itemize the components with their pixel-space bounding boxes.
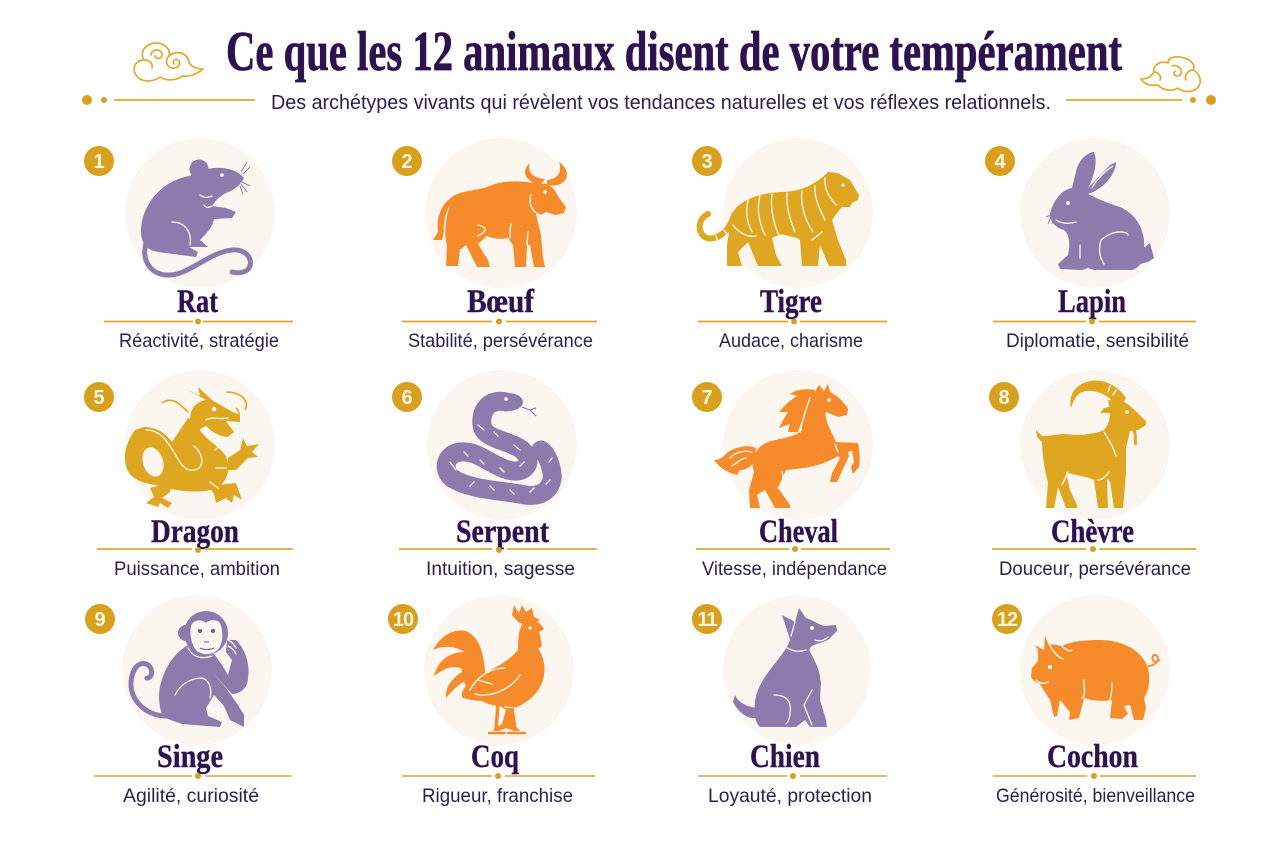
icon backdrop [1020,370,1170,520]
badge 12: 12 [997,609,1018,631]
divider [993,773,1196,779]
divider [992,546,1196,552]
icon: goat [1036,380,1146,508]
icon backdrop [427,370,577,520]
description: Audace, charisme [719,330,863,352]
description: Vitesse, indépendance [702,558,887,580]
icon: monkey [131,611,248,727]
panel: Tigre [692,138,887,352]
panel: Coq [388,595,595,807]
right ornament [1066,95,1216,105]
panel: Chien [692,595,887,807]
icon: rat [141,160,250,275]
badge 11: 11 [697,609,717,631]
divider [399,547,597,553]
divider [698,318,887,324]
left ornament [82,95,255,105]
icon backdrop [1020,595,1170,745]
divider [402,773,595,779]
name: Rat [177,284,218,320]
panel: Lapin [985,138,1196,352]
name: Chèvre [1051,514,1134,550]
badge 5: 5 [93,387,105,409]
icon backdrop [723,138,873,288]
badge 4 [985,146,1015,176]
badge 10 [388,604,418,634]
header [82,21,1216,114]
badge 9 [85,604,115,634]
description: Rigueur, franchise [422,785,573,807]
icon: tiger [700,172,859,266]
icon backdrop [125,370,275,520]
description: Intuition, sagesse [426,558,575,580]
divider [696,546,890,552]
panel: Dragon [84,370,293,580]
description: Stabilité, persévérance [408,330,593,352]
badge 6: 6 [401,387,413,409]
icon: snake [446,393,552,495]
icon: dragon [125,387,259,508]
name: Lapin [1058,284,1126,320]
icon backdrop [425,138,577,288]
description: Loyauté, protection [708,785,872,807]
badge 8 [989,382,1019,412]
name: Bœuf [467,284,535,320]
icon backdrop [723,595,871,745]
badge 4: 4 [994,151,1006,173]
panel: Bœuf [392,138,597,352]
icon backdrop [424,595,574,745]
badge 1: 1 [93,151,105,173]
badge 5 [84,382,114,412]
description: Diplomatie, sensibilité [1006,330,1189,352]
icon: right cloud [1141,57,1200,92]
badge 2 [392,146,422,176]
panel: Serpent [392,370,597,580]
panel: Cheval [692,370,890,580]
name: Dragon [151,514,239,550]
divider [97,547,293,553]
badge 11 [692,604,722,634]
panel: Singe [85,595,292,807]
panel: Chèvre [989,370,1196,580]
icon backdrop [1020,138,1170,288]
description: Réactivité, stratégie [119,330,279,352]
divider [104,318,293,324]
name: Tigre [760,284,822,320]
badge 7: 7 [701,387,713,409]
name: Chien [750,739,820,775]
name: Singe [157,739,223,775]
icon backdrop [122,595,272,745]
badge 1 [84,146,114,176]
badge 3: 3 [701,151,713,173]
badge 8: 8 [998,387,1010,409]
badge 12 [992,604,1022,634]
panel: Cochon [992,595,1196,807]
divider [94,773,292,779]
icon: rabbit [1046,152,1154,270]
icon: left cloud [134,43,203,81]
icon: horse [714,384,860,508]
divider [698,773,887,779]
name: Cochon [1047,739,1138,775]
description: Agilité, curiosité [123,785,259,807]
panel: Rat [84,138,293,352]
badge 7 [692,382,722,412]
badge 2: 2 [401,151,413,173]
icon backdrop [723,370,873,520]
description: Puissance, ambition [114,558,280,580]
badge 9: 9 [94,609,106,631]
description: Générosité, bienveillance [996,785,1195,807]
icon: rooster [433,605,545,733]
icon: ox [433,162,567,267]
name: Cheval [759,514,838,550]
icon: dog [733,608,837,727]
name: Coq [471,739,520,775]
divider [402,318,597,324]
name: Serpent [456,514,549,550]
icon: pig [1031,636,1160,720]
badge 10: 10 [393,609,414,631]
subtitle: Des archétypes vivants qui révèlent vos tendances naturelles et vos réflexes relationnels. [271,91,1051,114]
divider [993,318,1196,324]
badge 6 [392,382,422,412]
description: Douceur, persévérance [999,558,1191,580]
icon backdrop [125,138,275,288]
badge 3 [692,146,722,176]
